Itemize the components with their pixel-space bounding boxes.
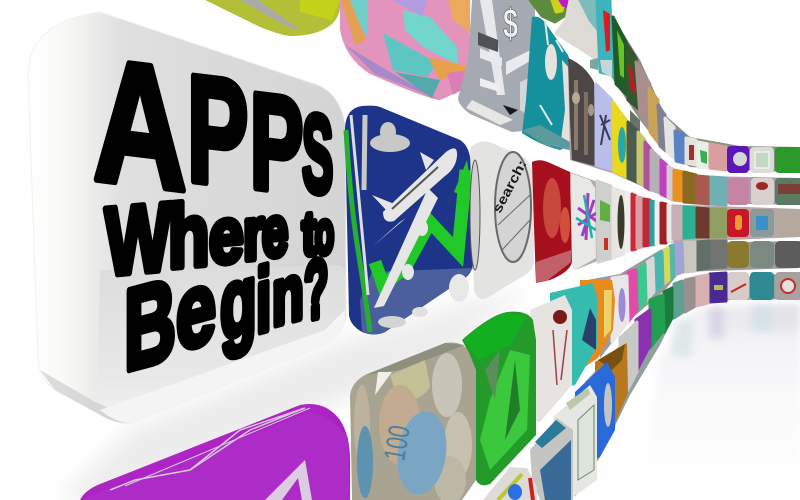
tile: purple envelope bbox=[80, 404, 350, 500]
headline: Where to: W bbox=[105, 182, 172, 296]
headline: Where to: e bbox=[262, 190, 288, 272]
row of small tiles at top bbox=[530, 0, 676, 160]
tile: house on green bbox=[775, 178, 800, 205]
tile: green bbox=[775, 147, 800, 173]
row five backing bbox=[575, 272, 800, 497]
row five right tiles, far to near bbox=[483, 272, 800, 500]
tile: search magnifier bbox=[470, 142, 534, 299]
headline: APPS bbox=[93, 22, 333, 228]
tile: white red cap bbox=[751, 178, 774, 205]
tile: dollar maze bbox=[458, 0, 535, 132]
headline: Begin?: e bbox=[176, 247, 216, 374]
tile: laptop bbox=[530, 418, 573, 500]
row: top right tiles bbox=[675, 131, 800, 173]
headline: Begin?: ? bbox=[304, 240, 328, 338]
coin value: 100 bbox=[379, 423, 417, 463]
tile: airplane and rising green arrow bbox=[345, 106, 473, 335]
headline: Where to: o bbox=[315, 199, 334, 267]
tile: white and teal bbox=[556, 0, 598, 60]
headline: Where to: h bbox=[168, 184, 210, 287]
tile: lavender bbox=[596, 84, 612, 170]
tile: purple speech bubble bbox=[727, 146, 749, 173]
tile: green leaf bbox=[613, 17, 628, 96]
tile: dark orange bbox=[595, 343, 628, 440]
tile: blue bbox=[575, 362, 615, 470]
headline: Begin?: B bbox=[124, 253, 176, 396]
headline: Begin?: i bbox=[256, 248, 271, 352]
headline: Where to: e bbox=[209, 191, 243, 282]
tile: green facets bbox=[462, 312, 536, 485]
headline: APPS: A bbox=[93, 22, 187, 228]
green arrow bbox=[375, 170, 466, 285]
row four backing bbox=[587, 241, 800, 358]
tile: coins bbox=[350, 342, 476, 500]
tile: yellow bbox=[613, 102, 627, 177]
headline: Begin?: g bbox=[220, 243, 257, 362]
tile: teal pattern bbox=[522, 17, 571, 150]
tile: blue square bbox=[750, 209, 774, 237]
headline: Where to: r bbox=[243, 191, 264, 276]
search text: search: bbox=[490, 158, 530, 216]
main white tile bbox=[28, 12, 346, 423]
clouds bbox=[370, 122, 469, 328]
wall shadow beneath main tile bbox=[60, 290, 530, 500]
tile: pastel shapes bbox=[340, 0, 470, 100]
tile: white with purple oval bbox=[612, 276, 628, 342]
tile: orange bbox=[580, 280, 615, 370]
headline: Begin? bbox=[124, 240, 328, 396]
headline: Begin?: n bbox=[272, 246, 304, 344]
lower reflection band bbox=[360, 268, 473, 334]
tile: teal bbox=[550, 283, 597, 390]
headline: Where to bbox=[105, 182, 334, 296]
left edge stripes bbox=[346, 130, 370, 332]
row one backing bbox=[610, 15, 800, 173]
tile: chart bbox=[750, 147, 774, 173]
tile: white with colourful flower bbox=[571, 173, 598, 270]
headline: APPS: S bbox=[302, 90, 333, 217]
tile: red circle bbox=[775, 272, 800, 300]
floor reflection bbox=[640, 303, 800, 500]
row three backing bbox=[570, 172, 800, 270]
tile: multicolour swirl bbox=[530, 0, 568, 22]
tile: red with figure bbox=[727, 209, 749, 237]
tile: dark hair pattern bbox=[568, 58, 595, 166]
headline: APPS: P bbox=[187, 42, 248, 220]
tile: colourful disc bbox=[483, 467, 537, 500]
tile: white with green chart bbox=[553, 385, 597, 500]
dollar sign: $ bbox=[503, 1, 518, 48]
tile: red pattern bbox=[532, 160, 572, 283]
row two right tiles bbox=[568, 58, 800, 205]
headline: APPS: P bbox=[250, 64, 303, 223]
row three right tiles bbox=[597, 181, 800, 262]
row four right tiles, far to near bbox=[462, 241, 800, 485]
airplane bbox=[372, 148, 457, 308]
row two backing bbox=[568, 58, 800, 205]
headline: Where to: t bbox=[302, 200, 316, 269]
tile: white with red flower bbox=[530, 295, 572, 422]
tile: olive green top bbox=[205, 0, 340, 36]
